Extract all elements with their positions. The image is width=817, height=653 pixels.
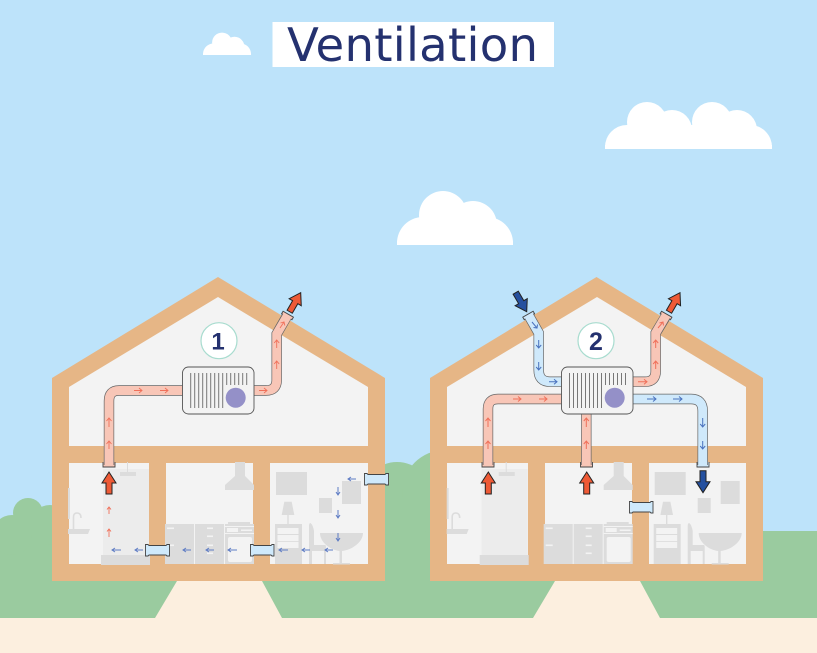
house 2 large blue arrow dining room	[696, 471, 710, 493]
house 2 large red arrow outside	[663, 289, 686, 315]
house 1	[52, 277, 388, 581]
house 1 air flow arrows blue	[112, 477, 356, 552]
house 1 number badge: 1	[211, 328, 225, 356]
house 2 walls	[430, 277, 763, 581]
house 2 blue ducts	[523, 311, 709, 467]
house 1 ventilation unit	[182, 367, 254, 414]
house 1 transfer duct outside wall	[364, 474, 388, 485]
house 2 air flow arrows blue	[532, 322, 705, 449]
house 2 red ducts	[482, 311, 672, 467]
house 1 transfer duct bathroom	[146, 544, 170, 556]
house 2 air flow arrows red	[486, 322, 664, 449]
title: Ventilation	[287, 18, 538, 72]
cloud: large	[605, 102, 772, 149]
house 2 large blue arrow outside	[510, 289, 533, 315]
house 1 air flow arrows red	[106, 322, 285, 537]
house 1 large red arrow outside	[284, 289, 307, 315]
house 1 attic	[69, 297, 368, 446]
house 1 dining room	[270, 463, 368, 564]
house 1 number badge	[201, 323, 237, 359]
house 1 kitchen	[165, 462, 254, 564]
house 2 number badge	[578, 323, 614, 359]
house 2 bathroom	[447, 462, 529, 565]
cloud: small	[203, 32, 251, 55]
house 1 bathroom	[68, 462, 150, 565]
green hills and ground	[0, 450, 817, 618]
house 2	[430, 277, 763, 581]
house 2 attic	[447, 297, 746, 446]
cream road and paths	[0, 581, 817, 653]
house 2 kitchen	[544, 462, 633, 564]
house 2 large red arrow bathroom	[481, 472, 495, 494]
house 2 number badge: 2	[589, 328, 603, 356]
house 2 ventilation unit	[562, 367, 633, 414]
cloud: medium	[397, 191, 513, 245]
house 1 transfer duct kitchen	[250, 544, 274, 556]
house 1 walls	[52, 277, 385, 581]
house 2 dining room	[649, 463, 746, 564]
house 1 large red arrow room	[102, 472, 116, 494]
house 1 extract duct	[103, 311, 293, 467]
house 2 large red arrow kitchen	[580, 472, 594, 494]
house 2 transfer duct	[630, 502, 653, 513]
